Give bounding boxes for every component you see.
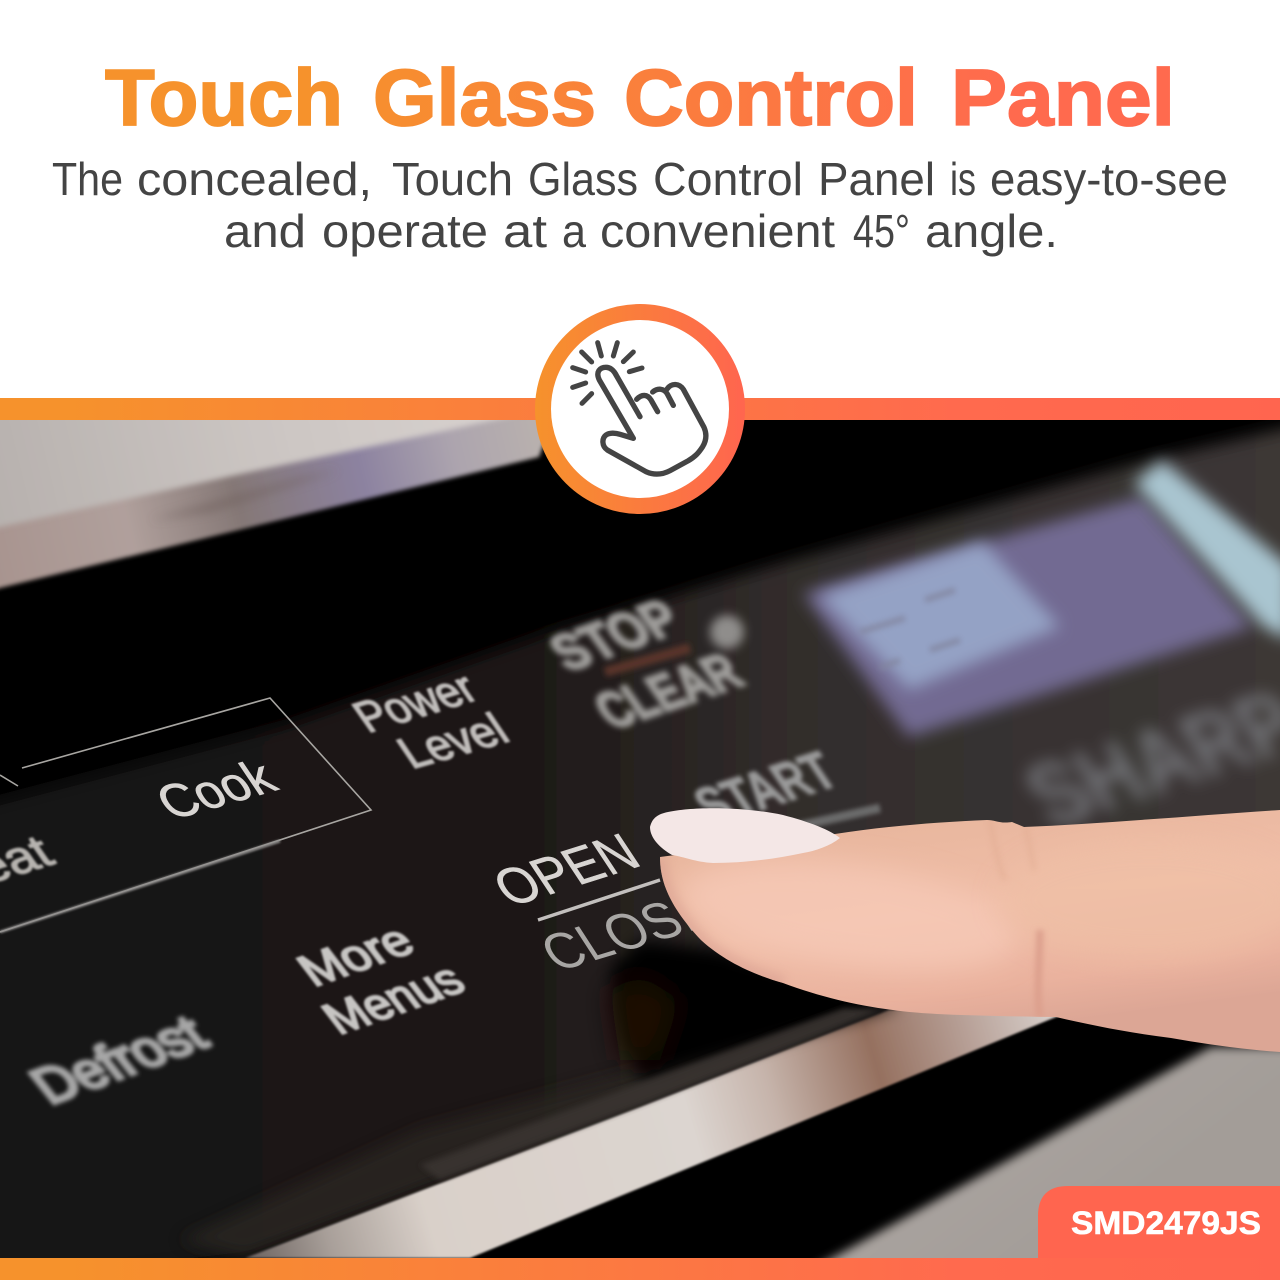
title: Touch [105,53,343,142]
panel lighter band near strip [198,1086,620,1258]
subtitle: concealed, [137,153,372,205]
reflection warm tone [610,975,680,1060]
fingernail [650,808,840,863]
title [105,53,1175,142]
label: Power Level: Level [388,705,518,778]
label: START [692,748,882,828]
subtitle: Control [653,153,803,205]
reflection under finger [610,940,900,1080]
label: OPEN / CLOSE: OPEN [482,822,650,917]
cook button outline [0,698,371,932]
label: Defrost: Defrost [18,1005,219,1115]
top gradient bar [0,398,1280,420]
photo: finger pressing the touch glass control panel [0,390,1280,1280]
title: Control [624,53,918,142]
label: OPEN / CLOSE: CLOSE [529,880,726,982]
label: OPEN / CLOSE [497,834,692,968]
title: Panel [951,53,1175,142]
subtitle: Touch [392,153,513,205]
subtitle: a [562,205,586,257]
label: STOP CLEAR [546,596,750,732]
subtitle: convenient [600,205,835,257]
label: Power Level [350,675,512,770]
subtitle: operate [322,205,488,257]
finger right highlight [1000,840,1280,960]
subtitle: Glass [528,153,638,205]
display digits [820,542,1060,690]
model tag [1038,1186,1280,1258]
label: Power Level: Power [343,663,487,742]
subtitle: easy-to-see [990,153,1228,205]
display window [803,497,1252,737]
upper steel bevel [0,420,544,592]
finger top crease [990,820,1034,880]
label: START: START [683,741,849,837]
display edge highlight [1134,460,1280,640]
title: Glass [373,53,596,142]
lower cook outline thicker blur [0,841,280,932]
label: More Menus: More [287,915,425,996]
tap rays [573,343,642,403]
label: Cook: Cook [146,750,286,829]
icon: touch hand in circle [543,312,737,506]
subtitle [52,153,1228,257]
subtitle: 45° [853,205,910,257]
label: STOP CLEAR: STOP [538,588,692,682]
finger crease [1038,930,1040,1018]
label: More Menus: Menus [312,954,475,1044]
finger highlight [688,858,1011,970]
dark gray strip above steel [420,1008,880,1180]
label: STOP CLEAR: CLEAR [583,642,753,740]
bevel dark streak [174,476,312,518]
subtitle: is [950,153,976,205]
model tag: SMD2479JS [1071,1205,1261,1241]
lower right gray surface [817,1044,1280,1258]
upper steel face [0,420,502,529]
subtitle: Panel [818,153,935,205]
dark glass control panel [0,425,1280,1280]
lower stainless steel strip [245,1000,1100,1258]
tip shading [660,857,783,983]
hand outline [598,367,706,474]
subtitle: angle. [925,205,1058,257]
subtitle: The [52,153,123,205]
bottom gradient bar [0,1258,1280,1280]
subtitle: at [503,205,547,257]
label: More Menus [294,930,466,1036]
finger [660,810,1280,1052]
subtitle: and [224,205,306,257]
